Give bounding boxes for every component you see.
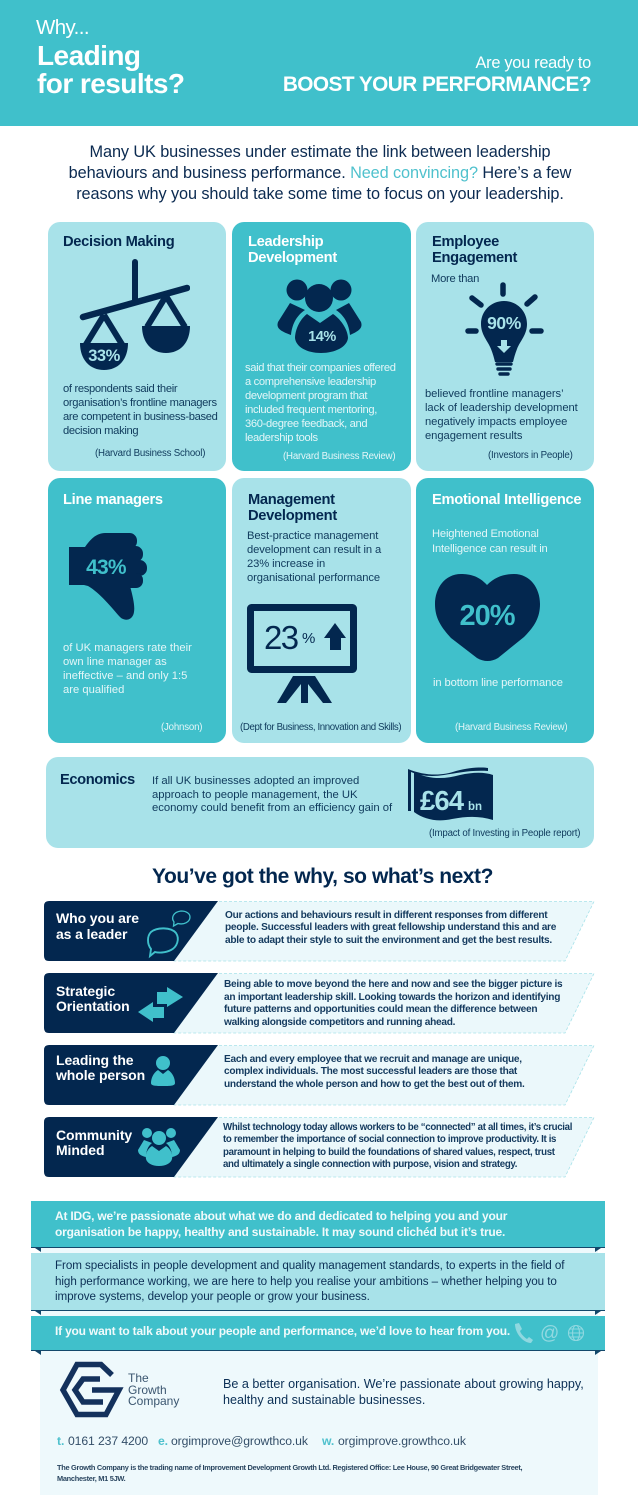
body text: decision making xyxy=(63,425,138,437)
icon: presentation board 23%: 23 xyxy=(264,619,298,656)
lead-in text: More than xyxy=(431,273,479,285)
heading: Line managers xyxy=(63,492,163,508)
ribbon: contact prompt xyxy=(31,1316,605,1351)
panel: leadership development xyxy=(232,222,411,471)
description: to remember the importance of social connection to improve productivity. It is xyxy=(223,1134,556,1145)
contact details: 0161 237 4200 xyxy=(68,1434,148,1448)
contact details: w. xyxy=(322,1434,334,1448)
header tagline: BOOST YOUR PERFORMANCE? xyxy=(283,73,591,96)
icon: presentation board 23% xyxy=(247,604,357,703)
legal text: The Growth Company is the trading name of Improvement Development Growth Ltd. Registered Office: Lee House, 90 Great Bridgewater Street, xyxy=(57,1463,522,1472)
label xyxy=(56,910,139,942)
body text: leadership tools xyxy=(245,432,318,444)
row: strategic orientation xyxy=(44,973,594,1034)
body text: lack of leadership development xyxy=(425,402,578,414)
header title: Leading xyxy=(37,40,140,71)
label: Orientation xyxy=(56,998,130,1014)
contact details xyxy=(57,1433,477,1449)
icon: heart 20%: 20% xyxy=(459,600,516,632)
heading: Emotional Intelligence xyxy=(432,492,581,508)
icon: group of people xyxy=(138,1127,182,1167)
label: whole person xyxy=(56,1067,145,1083)
source: (Harvard Business Review) xyxy=(455,722,567,733)
panel: employee engagement xyxy=(416,222,594,471)
body text: of UK managers rate their xyxy=(63,642,192,654)
ribbon text: improve systems, develop your people or grow your business. xyxy=(55,1290,370,1303)
header title: Why... xyxy=(36,16,89,39)
logo xyxy=(58,1361,183,1419)
row: leading the whole person xyxy=(44,1045,594,1106)
logo text: Company xyxy=(128,1394,179,1408)
panel: management development xyxy=(232,478,411,743)
ribbon text: high performance working, we are here to help you realise your ambitions – whether helping you to xyxy=(55,1274,557,1288)
intro text: behaviours and business performance. Need convincing? Here’s a few xyxy=(69,164,571,182)
heading: Engagement xyxy=(432,250,517,266)
text panel xyxy=(174,973,594,1034)
contact details: e. xyxy=(158,1434,168,1448)
ribbon: specialists xyxy=(31,1253,605,1311)
label: Minded xyxy=(56,1142,104,1158)
body text: economy could benefit from an efficiency gain of xyxy=(152,802,392,814)
ribbon text xyxy=(55,1208,507,1240)
body text: in bottom line performance xyxy=(433,676,563,688)
body text: believed frontline managers’ xyxy=(425,388,564,400)
text panel xyxy=(174,1045,594,1106)
row: who you are as a leader xyxy=(44,901,594,962)
heading: Development xyxy=(248,250,337,266)
footer background xyxy=(40,1245,598,1495)
header tagline xyxy=(283,54,591,96)
ribbon text: organisation be happy, healthy and sustainable. It may sound clichéd but it’s true. xyxy=(55,1225,505,1239)
icon: scales 33% xyxy=(80,259,190,370)
header title xyxy=(36,16,184,99)
label: Who you are xyxy=(56,910,139,926)
section heading: You’ve got the why, so what’s next? xyxy=(152,865,493,888)
body text: a comprehensive leadership xyxy=(245,376,376,388)
label xyxy=(56,982,130,1014)
description: complex individuals. The most successful leaders are those that xyxy=(224,1066,517,1077)
contact details: orgimprove.growthco.uk xyxy=(338,1434,466,1448)
label tab xyxy=(44,973,218,1033)
description: people. Successful leaders with great fellowship understand this and are xyxy=(225,922,556,933)
ribbon text xyxy=(55,1258,564,1304)
source: (Investors in People) xyxy=(488,450,573,461)
body text: development can result in a xyxy=(247,544,381,556)
description: Being able to move beyond the here and now and see the bigger picture is xyxy=(224,979,562,990)
panel: economics xyxy=(46,757,594,848)
label: Leading the xyxy=(56,1052,133,1068)
label tab xyxy=(44,901,218,961)
description: able to adapt their style to suit the environment and get the best results. xyxy=(225,935,552,946)
body text: Best-practice management xyxy=(247,530,378,542)
icon: heart 20% xyxy=(435,574,540,661)
icon: light bulb 90%: 90% xyxy=(487,313,522,333)
body text xyxy=(245,362,396,444)
icon: scales 33%: 33% xyxy=(88,347,121,365)
heading: Leadership xyxy=(248,234,323,250)
body text: engagement results xyxy=(425,430,522,442)
icon: thumbs down 43% xyxy=(69,533,147,620)
ribbon text: At IDG, we’re passionate about what we do and dedicated to helping you and your xyxy=(55,1208,507,1222)
header tagline: Are you ready to xyxy=(476,54,591,72)
intro text: reasons why you should take some time to focus on your leadership. xyxy=(76,185,564,203)
body text: included frequent mentoring, xyxy=(245,404,377,416)
body text: of respondents said their xyxy=(63,383,177,395)
text panel xyxy=(174,901,594,962)
heading: Economics xyxy=(60,772,135,788)
panel: emotional intelligence xyxy=(416,478,594,743)
description xyxy=(225,910,556,946)
body text: organisational performance xyxy=(247,572,380,584)
label: Strategic xyxy=(56,982,115,998)
description: understand the whole person and how to get the best out of them. xyxy=(224,1079,525,1090)
body text: If all UK businesses adopted an improved xyxy=(152,775,359,787)
source: (Dept for Business, Innovation and Skills) xyxy=(240,722,401,733)
icon: speech bubbles xyxy=(147,910,191,958)
body text: own line manager as xyxy=(63,656,167,668)
description: walking alongside competitors and running ahead. xyxy=(224,1017,455,1028)
footer tagline xyxy=(223,1376,584,1408)
label xyxy=(56,1128,132,1158)
source: (Harvard Business School) xyxy=(95,448,205,459)
body text: ineffective – and only 1:5 xyxy=(63,670,187,682)
panel: line managers xyxy=(48,478,226,743)
footer tagline: healthy and sustainable businesses. xyxy=(223,1393,425,1407)
ribbon text: If you want to talk about your people and performance, we’d love to hear from you. xyxy=(55,1324,510,1338)
description: paramount in helping to build the foundations of shared values, respect, trust xyxy=(223,1147,555,1158)
body text: negatively impacts employee xyxy=(425,416,567,428)
description xyxy=(224,979,562,1028)
icon: people 14% xyxy=(278,280,362,353)
icon: presentation board 23%: % xyxy=(302,630,315,647)
heading: Employee xyxy=(432,234,499,250)
header title: for results? xyxy=(37,68,184,99)
row: community minded xyxy=(44,1117,594,1178)
body text xyxy=(425,388,578,442)
contact details: orgimprove@growthco.uk xyxy=(171,1434,308,1448)
body text: 23% increase in xyxy=(247,558,325,570)
label tab xyxy=(44,1045,218,1105)
logo mark xyxy=(58,1361,124,1419)
logo text: Growth xyxy=(128,1383,167,1397)
logo text: The xyxy=(128,1371,149,1385)
contact details: t. xyxy=(57,1434,64,1448)
icons: phone, email, web: @ xyxy=(540,1323,559,1344)
description xyxy=(224,1054,525,1090)
icon: banknote flag £64bn: bn xyxy=(468,801,482,813)
heading xyxy=(248,492,338,524)
body text xyxy=(152,775,392,814)
heading: Management xyxy=(248,492,335,508)
icon: thumbs down 43%: 43% xyxy=(86,556,127,579)
logo text xyxy=(128,1373,179,1408)
body text: Heightened Emotional xyxy=(432,528,539,540)
heading xyxy=(248,234,338,266)
body text: said that their companies offered xyxy=(245,362,396,374)
description: Our actions and behaviours result in different responses from different xyxy=(225,910,547,920)
description: Each and every employee that we recruit and manage are unique, xyxy=(224,1054,522,1064)
body text: approach to people management, the UK xyxy=(152,789,358,801)
label: as a leader xyxy=(56,926,127,942)
intro text xyxy=(69,143,572,203)
body text xyxy=(63,383,218,437)
body text xyxy=(247,530,382,584)
description: Whilst technology today allows workers to be “connected” at all times, it’s crucial xyxy=(223,1122,572,1132)
body text xyxy=(432,528,548,555)
source: (Impact of Investing in People report) xyxy=(429,828,580,839)
icon: light bulb 90% xyxy=(465,282,544,376)
description xyxy=(223,1122,572,1172)
heading: Decision Making xyxy=(63,234,174,250)
icon: banknote flag £64bn: £64 xyxy=(420,785,465,816)
source: (Johnson) xyxy=(161,722,202,733)
heading xyxy=(432,234,518,266)
ribbon: IDG passion xyxy=(31,1201,605,1248)
heading: Development xyxy=(248,508,337,524)
body text: organisation’s frontline managers xyxy=(63,397,217,409)
body text: development program that xyxy=(245,390,367,402)
body text: are qualified xyxy=(63,684,124,696)
intro text: Many UK businesses under estimate the link between leadership xyxy=(90,143,550,161)
body text xyxy=(63,642,192,696)
description: an important leadership skill. Looking towards the horizon and identifying xyxy=(224,992,560,1003)
body text: 360-degree feedback, and xyxy=(245,418,367,430)
description: and ultimately a single connection with purpose, vision and strategy. xyxy=(223,1159,517,1170)
icon: banknote flag £64bn xyxy=(408,768,493,820)
icon: person xyxy=(151,1056,175,1086)
icon: people 14%: 14% xyxy=(308,329,336,345)
icon: opposing arrows xyxy=(138,987,183,1022)
source: (Harvard Business Review) xyxy=(283,451,395,462)
ribbon text: From specialists in people development and quality management standards, to experts in the field of xyxy=(55,1259,564,1272)
label tab xyxy=(44,1117,220,1177)
body text: are competent in business-based xyxy=(63,411,218,423)
panel: decision making xyxy=(48,222,226,471)
label xyxy=(56,1052,145,1083)
header banner xyxy=(0,0,638,126)
footer tagline: Be a better organisation. We’re passionate about growing happy, xyxy=(223,1377,584,1391)
description: future patterns and opportunities could mean the difference between xyxy=(224,1004,537,1015)
label: Community xyxy=(56,1126,132,1142)
icons: phone, email, web xyxy=(513,1322,587,1344)
legal text xyxy=(57,1463,522,1484)
body text: Intelligence can result in xyxy=(432,543,548,555)
legal text: Manchester, M1 5JW. xyxy=(57,1474,125,1482)
text panel xyxy=(174,1117,594,1178)
